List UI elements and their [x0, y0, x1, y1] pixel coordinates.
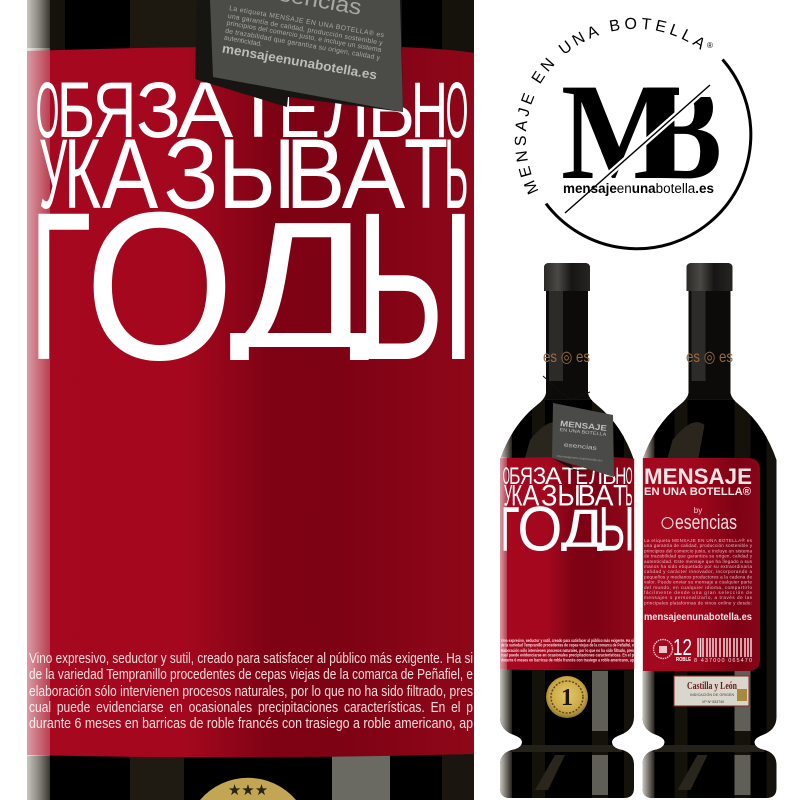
headline line 2: В [285, 118, 345, 229]
back label body copy: valor. Puede enviar su mensaje a cualquier parte [644, 580, 752, 585]
wine description: elaboración sólo intervienen procesos naturales, por lo que no ha sido filtrado, pres [29, 684, 473, 700]
small description [501, 638, 634, 662]
headline line 1: Е [278, 65, 320, 154]
headline line 2: У [39, 118, 67, 229]
logo curved text: ® [707, 41, 713, 50]
small headline [503, 467, 632, 551]
bottle glass bottom [27, 750, 474, 800]
small tag: esencias [564, 443, 597, 452]
back label body copy: una garantía de calidad, producción sostenible y [644, 543, 753, 548]
back label body copy: principales plataformas de vinos online y desde: [644, 600, 752, 605]
back label body copy: de trazabilidad que garantiza su origen, calidad y [644, 554, 753, 559]
barcode [694, 638, 752, 664]
wine description: cual puede evidenciarse en ocasionales precipitaciones características. En el p [29, 700, 473, 716]
hanging tag: una garantía de calidad, producción sostenible y [227, 13, 384, 47]
back label url: mensajeenunabotella.es [644, 612, 752, 623]
headline line 3: Д [229, 185, 373, 386]
headline line 2 [40, 138, 466, 209]
small headline: В [578, 479, 596, 512]
hanging tag: mensajeenunabotella.es [221, 41, 378, 83]
front bottle [500, 263, 635, 798]
headline line 3: Ы [355, 168, 476, 404]
label [500, 457, 635, 670]
headline line 2: А [342, 118, 405, 229]
esencias logo: esencias [675, 512, 737, 534]
logo curved text: MENSAJE EN UNA BOTELLA [514, 18, 704, 194]
logo url: mensajeenunabotella.es [563, 181, 714, 196]
text: Ь [444, 118, 468, 229]
small headline: О [503, 464, 510, 490]
neck brand text: es ◎ es [543, 349, 590, 366]
small headline: Б [509, 464, 521, 490]
small headline: А [545, 464, 562, 490]
hanging tag: La etiqueta MENSAJE EN UNA BOTELLA® es [229, 4, 385, 39]
back label body copy: manos ha sido etiquetado por su extraordinaria [644, 564, 752, 569]
seal [654, 640, 672, 658]
back label body copy: pequeños y medianos productores a la cadena de [644, 574, 752, 579]
by: by [694, 506, 702, 515]
back label brand title: MENSAJE [644, 464, 752, 489]
esencias logo [662, 512, 737, 534]
hanging tag: de trazabilidad que garantiza su origen, calidad y [225, 28, 381, 62]
small description: de la variedad Tempranillo procedentes de cepas viejas de la comarca de Peñafiel, e [501, 643, 634, 648]
small description: cual puede evidenciarse en ocasionales precipitaciones características. En el p [501, 653, 634, 658]
small tag: MENSAJE [560, 419, 608, 433]
small headline: Н [615, 464, 626, 490]
headline line 3 [38, 212, 465, 361]
bottle glass top [27, 0, 474, 53]
headline line 1: З [136, 65, 181, 154]
glass [500, 263, 634, 798]
back label body copy: calidad y carácter innovador, incorporando a [644, 569, 752, 574]
logo monogram: M [561, 55, 680, 208]
gold medal top [200, 778, 296, 800]
headline line 1: Б [57, 65, 95, 154]
logo monogram: B [645, 55, 722, 208]
headline line 1: Я [93, 65, 136, 154]
small headline: З [533, 464, 546, 490]
small headline: Ы [557, 479, 581, 512]
headline line 2: Ы [218, 118, 296, 229]
logo [514, 18, 752, 250]
back label body copy: fácilmente desde una gran selección de [644, 590, 752, 595]
hanging tag: principios del comercio justo, e incluye un sistema [226, 20, 382, 54]
gold medal top: ★★★ [228, 782, 268, 799]
age 12 roble: ROBLE [676, 657, 692, 663]
small tag [543, 376, 614, 477]
Castilla y León sticker: INDICACIÓN DE ORIGEN [690, 692, 734, 697]
back label brand title: EN UNA BOTELLA® [644, 486, 751, 498]
age 12 roble [673, 634, 692, 663]
small headline: Ь [602, 464, 617, 490]
small headline: А [523, 479, 540, 512]
back label body copy: mensajes o personalizarlo, a través de las [644, 595, 753, 600]
red label [27, 46, 476, 757]
small headline: Г [501, 495, 519, 565]
headline line 3: Г [29, 168, 91, 404]
headline line 1: Н [411, 65, 448, 154]
small headline: Ы [599, 495, 635, 565]
back label [643, 458, 760, 671]
headline line 2: К [64, 118, 101, 229]
headline line 1: Т [232, 65, 284, 154]
wine description: de la variedad Tempranillo procedentes de cepas viejas de la comarca de Peñafiel, e [29, 667, 473, 683]
small headline: А [595, 479, 614, 512]
small headline: У [504, 479, 512, 512]
hanging tag: autenticidad. [223, 35, 263, 48]
logo ring [546, 60, 751, 249]
back label body copy: del mundo, en cualquier idioma, compartirlo [644, 585, 752, 590]
age 12 roble: 12 [673, 634, 692, 660]
barcode: 8 437000 065470 [694, 658, 752, 664]
Castilla y León sticker [674, 676, 749, 706]
headline line 1: А [177, 65, 234, 154]
small headline: З [541, 479, 558, 512]
small tag: mensajeenunabotella.es [557, 454, 603, 463]
headline line 1 [37, 82, 467, 138]
neck brand text: es ◎ es [686, 349, 733, 366]
small headline: Т [562, 464, 577, 490]
text: Ь [625, 479, 633, 512]
small headline: Л [589, 464, 603, 490]
small description: Vino expresivo, seductor y sutil, creado para satisfacer al público más exigente. Ha si [501, 638, 634, 643]
glass [642, 263, 776, 798]
headline line 2: З [164, 118, 218, 229]
text: О [446, 65, 468, 154]
large bottle close-up [27, 0, 476, 800]
hanging tag [195, 0, 403, 112]
Castilla y León sticker: VP Nº 833740 [702, 700, 724, 704]
small description: durante 6 meses en barricas de roble francés con trasiego a roble americano, ap [501, 657, 634, 662]
wine description: Vino expresivo, seductor y sutil, creado para satisfacer al público más exigente. Ha si [29, 651, 473, 667]
small headline: Е [575, 464, 588, 490]
Castilla y León sticker: Castilla y León [687, 681, 737, 692]
small description: elaboración sólo intervienen procesos naturales, por lo que no ha sido filtrado, pres [501, 648, 634, 653]
headline line 3: О [84, 168, 234, 404]
headline line 2: Т [404, 118, 448, 229]
back label body copy [644, 537, 753, 605]
text: О [626, 464, 632, 490]
small headline: О [517, 495, 562, 565]
small tag: EN UNA BOTELLA [559, 427, 607, 437]
wine description [29, 651, 473, 732]
small headline: Т [613, 479, 626, 512]
small headline: К [511, 479, 523, 512]
back label body copy: autenticidad. Este mensaje que ha llegado a sus [644, 559, 753, 564]
headline line 1: Л [324, 65, 370, 154]
wine description: durante 6 meses en barricas de roble francés con trasiego a roble americano, ap [29, 716, 473, 732]
headline line 2: А [102, 118, 158, 229]
small headline: Д [561, 499, 604, 559]
back label body copy: La etiqueta MENSAJE EN UNA BOTELLA® es [644, 537, 753, 543]
gold medal [546, 676, 588, 718]
headline line 1: Ь [367, 65, 415, 154]
small headline: Я [520, 464, 533, 490]
gold medal: 1 [561, 685, 573, 711]
back bottle [642, 263, 776, 798]
back label body copy: principios del comercio justo, e incluye un sistema [644, 548, 752, 553]
headline line 1: О [36, 65, 59, 154]
